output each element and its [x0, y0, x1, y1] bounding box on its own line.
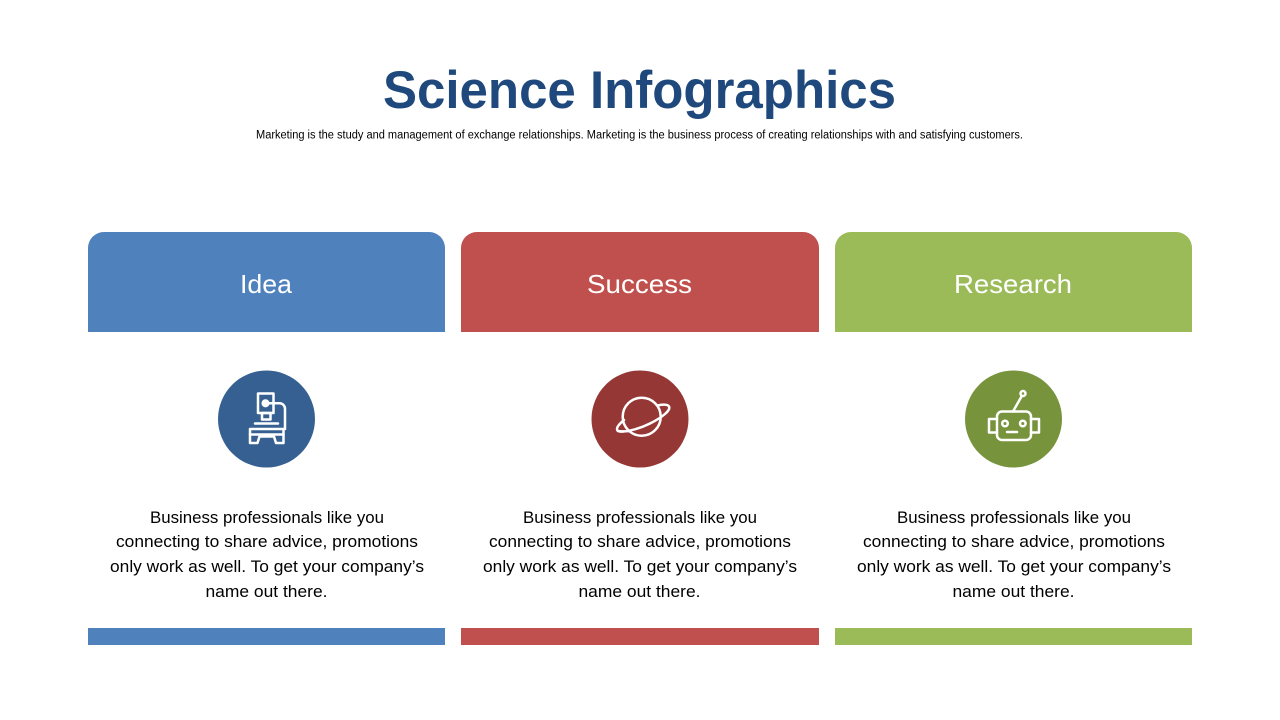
text block: idea: only work as well. To get your company’s	[110, 557, 424, 576]
panel: success	[461, 232, 819, 645]
heading: success: Success	[587, 269, 692, 299]
heading: research: Research	[954, 269, 1072, 299]
header: success	[461, 232, 819, 332]
footer bar: research	[835, 628, 1192, 645]
header: research	[835, 232, 1192, 332]
heading: idea: Idea	[240, 269, 293, 299]
footer bar: success	[461, 628, 819, 645]
text block: idea	[110, 508, 424, 601]
text block: success: only work as well. To get your company’s	[483, 557, 797, 576]
panel: research	[835, 232, 1192, 645]
icon: microscope	[218, 370, 315, 468]
icon: robot	[965, 370, 1062, 468]
text block: idea: name out there.	[206, 582, 328, 601]
text block: idea: Business professionals like you	[150, 508, 384, 527]
footer bar: idea	[88, 628, 445, 645]
subtitle: Marketing is the study and management of exchange relationships. Marketing is the business process of creating relationships with and satisfying customers.	[256, 130, 1023, 142]
text block: success: connecting to share advice, promotions	[489, 532, 791, 551]
header: idea	[88, 232, 445, 332]
text block: success: Business professionals like you	[523, 508, 757, 527]
text block: success: name out there.	[578, 582, 700, 601]
text block: research: connecting to share advice, promotions	[863, 532, 1165, 551]
text block: research: name out there.	[952, 582, 1074, 601]
text block: research: only work as well. To get your company’s	[857, 557, 1171, 576]
text block: success	[483, 508, 797, 601]
title: Science Infographics	[383, 61, 896, 120]
icon: planet	[592, 370, 688, 468]
text block: idea: connecting to share advice, promotions	[116, 532, 418, 551]
text block: research	[857, 508, 1171, 601]
panel: idea	[88, 232, 445, 645]
text block: research: Business professionals like you	[897, 508, 1131, 527]
